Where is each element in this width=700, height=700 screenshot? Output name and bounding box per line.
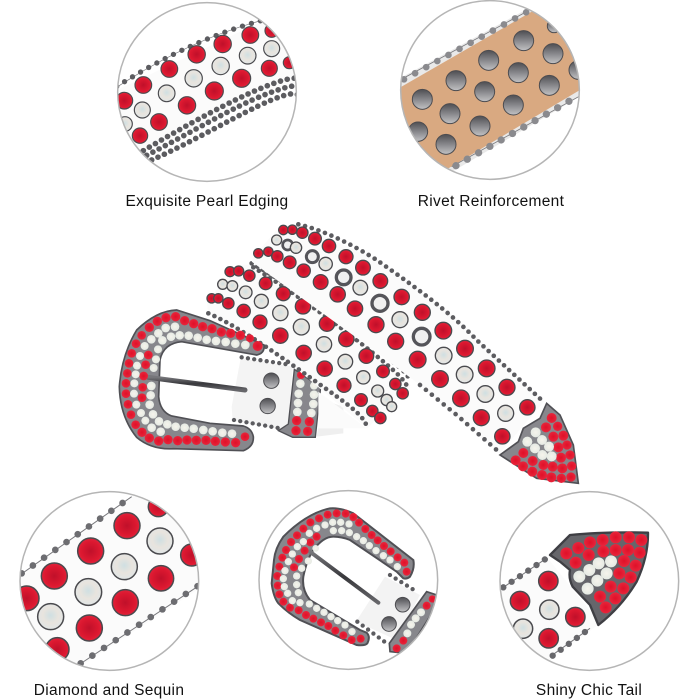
buckle prong	[148, 377, 245, 390]
buckle	[119, 310, 264, 451]
title: Shiny Chic Tail: Shiny Chic Tail	[536, 682, 642, 699]
buckle strap and keeper	[232, 357, 343, 437]
title: Diamond and Sequin: Diamond and Sequin	[34, 682, 184, 699]
prong	[310, 552, 378, 603]
panel: pearl edging detail	[113, 3, 307, 181]
panel: diamond and sequin detail	[14, 487, 210, 670]
belt body with gems	[207, 224, 578, 483]
belt tip	[500, 403, 578, 483]
strap with rivets	[356, 577, 420, 640]
panel: buckle detail	[259, 491, 438, 669]
panel: rivet reinforcement detail	[400, 0, 580, 180]
title: Rivet Reinforcement: Rivet Reinforcement	[418, 193, 565, 210]
lower loop of the belt	[207, 263, 411, 428]
main belt photo	[119, 224, 578, 483]
upper strap of the belt	[252, 224, 544, 454]
keeper	[389, 592, 437, 653]
title: Exquisite Pearl Edging: Exquisite Pearl Edging	[126, 193, 288, 210]
panel: shiny chic tail detail	[497, 492, 679, 670]
